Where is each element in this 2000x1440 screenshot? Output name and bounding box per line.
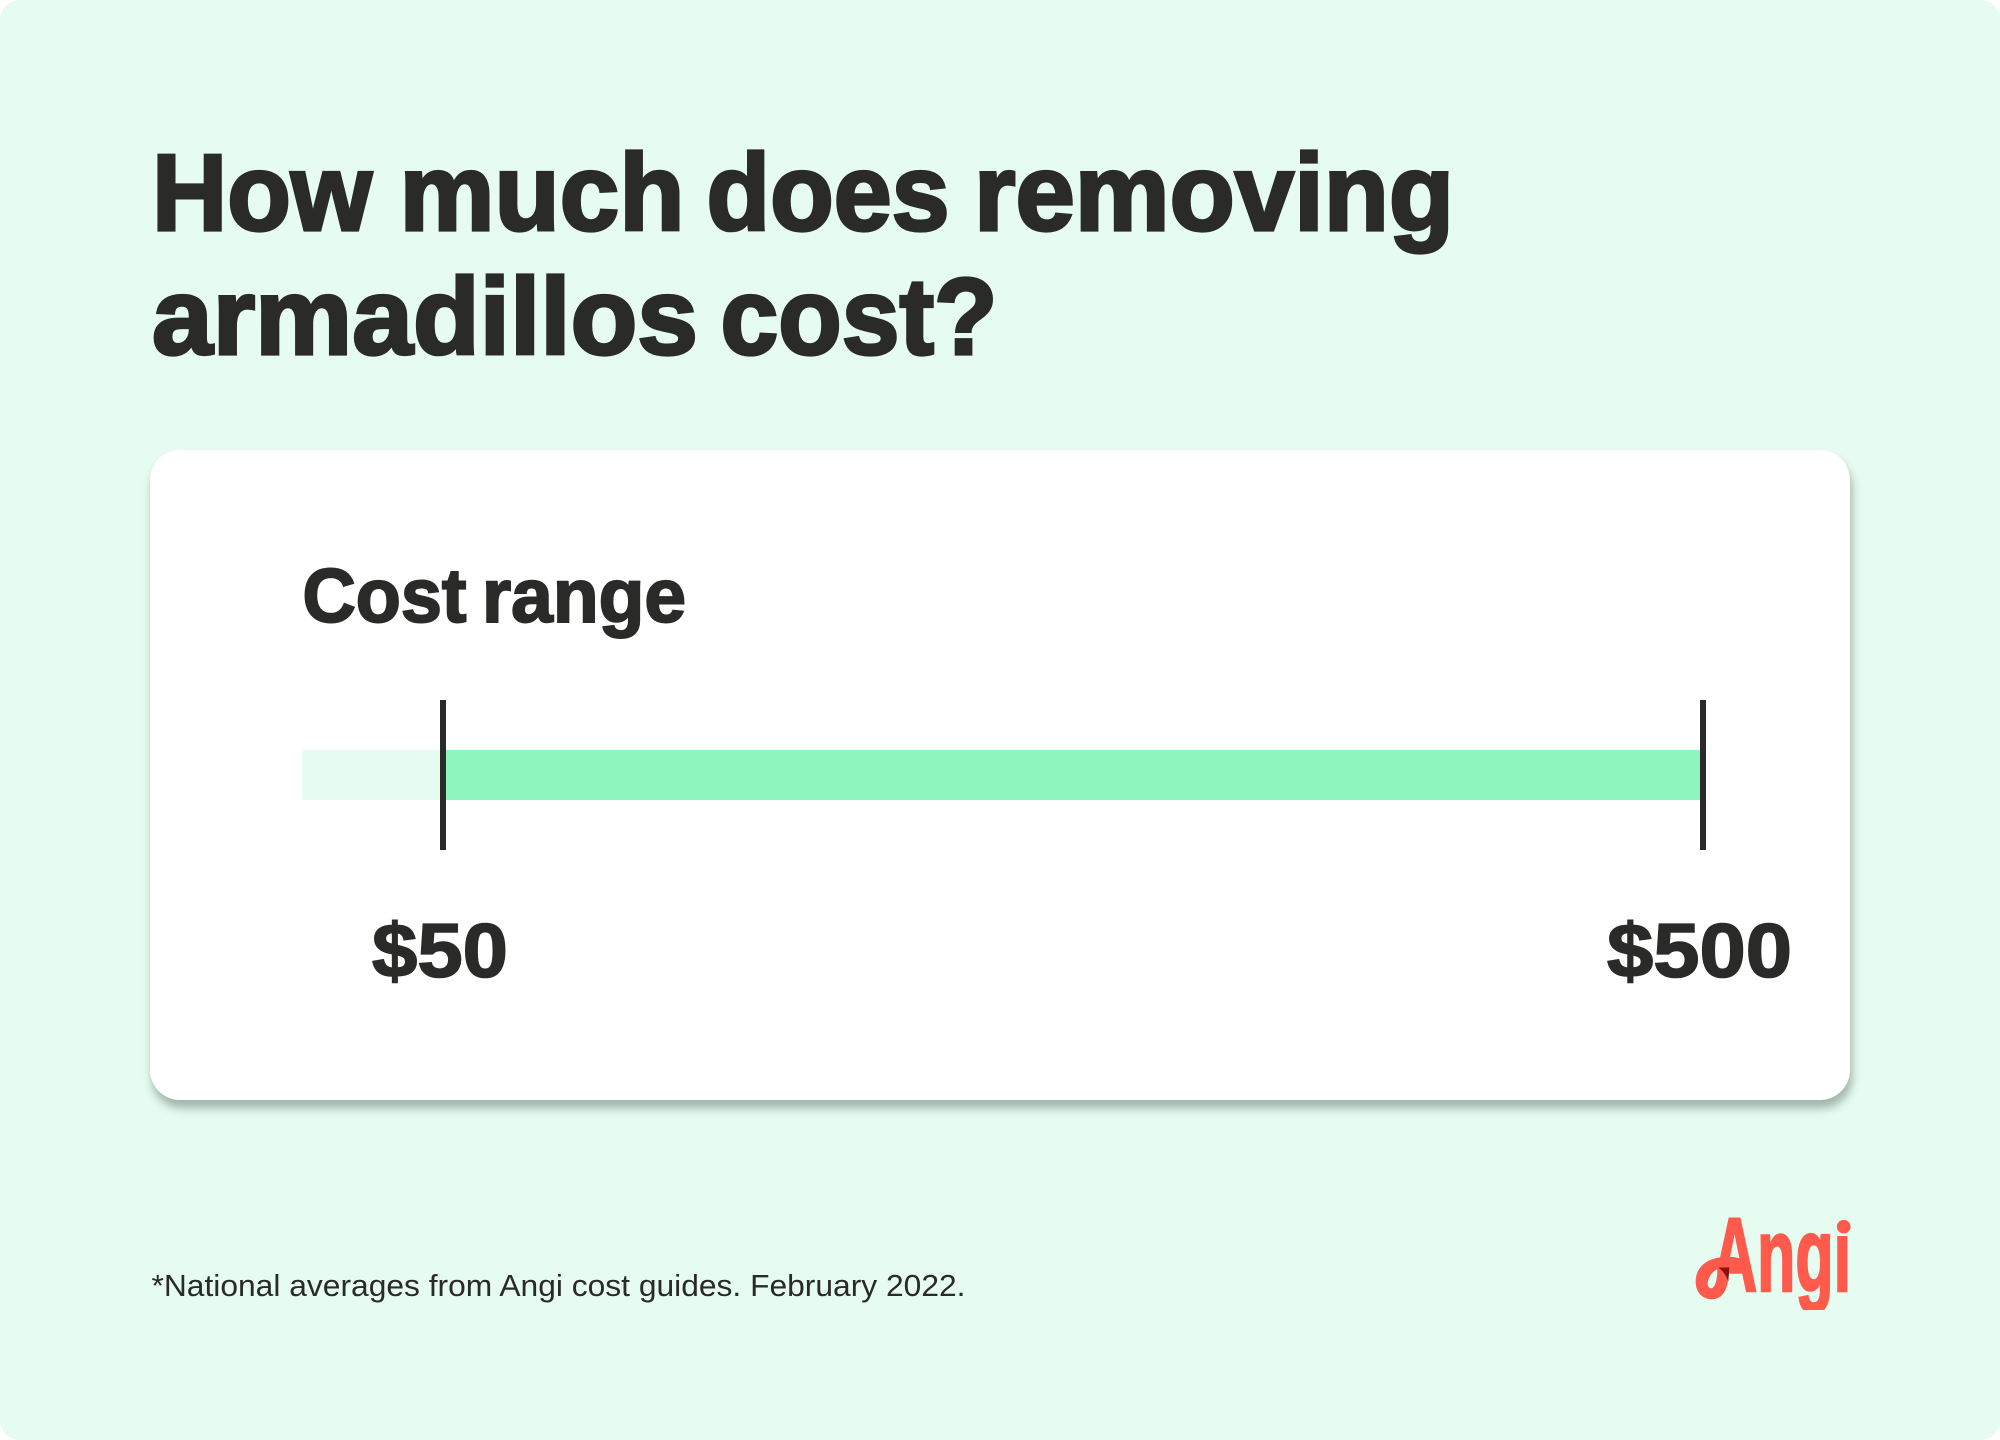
- bar track: [302, 750, 442, 800]
- heading: cost range: range: [482, 554, 686, 639]
- high tick: [1700, 700, 1706, 850]
- footnote: *National averages from Angi cost guides. February 2022.: [152, 1268, 966, 1303]
- infographic content: [152, 149, 1850, 1310]
- title: armadillos: [152, 256, 698, 378]
- logo: Angi: [1696, 1218, 1850, 1310]
- title: removing: [974, 132, 1454, 254]
- low value: $50: [372, 909, 508, 994]
- heading: cost range: Cost: [302, 554, 466, 639]
- logo: Angi: Angi: [1712, 1197, 1851, 1314]
- title: much: [400, 132, 684, 254]
- low tick: [440, 700, 446, 850]
- title: How: [152, 132, 372, 254]
- title: cost?: [720, 256, 998, 378]
- panel: cost range card: [150, 450, 1850, 1100]
- heading: cost range: [302, 554, 686, 639]
- title: [152, 132, 1454, 378]
- high value: $500: [1607, 909, 1792, 994]
- title: does: [706, 132, 950, 254]
- range bar chart: [302, 700, 1706, 850]
- bar range fill: [444, 750, 1702, 800]
